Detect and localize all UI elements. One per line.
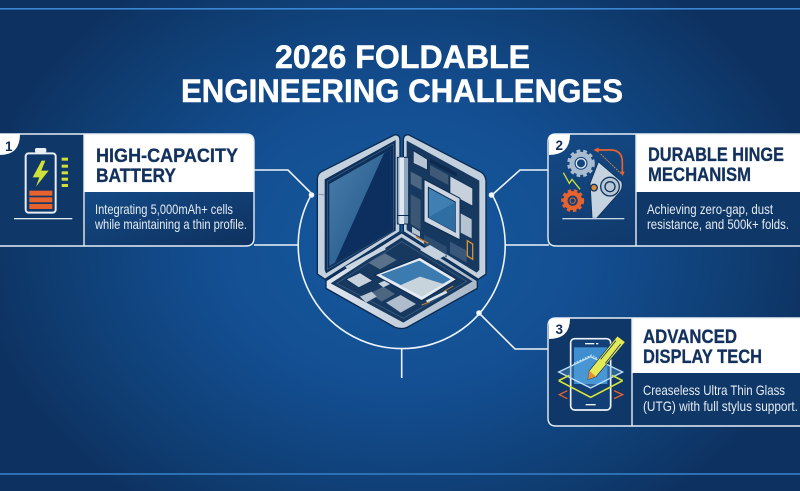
card 2 heading xyxy=(648,145,784,186)
icon: hinge and gears xyxy=(562,147,625,219)
card 1 panels xyxy=(0,134,254,246)
card 3 number badge: 3 xyxy=(556,322,564,337)
card 3 heading: ADVANCED xyxy=(643,327,737,348)
card 1 description xyxy=(94,201,247,232)
connector lines xyxy=(254,170,549,378)
card 2 number badge: 2 xyxy=(556,138,563,153)
card 3 description xyxy=(643,382,798,414)
card 2 number badge xyxy=(549,134,570,155)
title: 2026 FOLDABLE xyxy=(275,39,530,75)
device: hinge xyxy=(396,157,409,255)
card 3 heading xyxy=(643,327,762,368)
device: base panel xyxy=(326,233,477,329)
card 3 heading: DISPLAY TECH xyxy=(643,347,762,368)
card 1 number badge: 1 xyxy=(5,139,13,154)
card 3 number badge xyxy=(549,318,570,339)
icon: phone with stylus xyxy=(559,336,625,410)
device: left screen panel xyxy=(317,135,400,279)
title xyxy=(181,39,623,109)
foldable device illustration xyxy=(317,135,486,329)
title: ENGINEERING CHALLENGES xyxy=(181,73,623,109)
icon: battery xyxy=(14,148,72,219)
card 1 description: Integrating 5,000mAh+ cells xyxy=(95,201,233,217)
card 1 heading xyxy=(96,146,238,187)
device: right internals panel xyxy=(403,135,486,279)
card 2 heading: MECHANISM xyxy=(648,165,751,186)
card 2 panels xyxy=(548,134,800,246)
card 3: advanced display tech xyxy=(548,318,800,426)
card 1 heading: BATTERY xyxy=(96,166,176,187)
card 1 number badge xyxy=(0,134,20,155)
card 1: high-capacity battery xyxy=(0,134,254,246)
card 2 description: Achieving zero-gap, dust xyxy=(647,201,773,217)
card 2 description xyxy=(647,201,789,232)
card 1 heading: HIGH-CAPACITY xyxy=(96,146,238,167)
card 2: durable hinge mechanism xyxy=(548,134,800,246)
card 3 panels xyxy=(548,318,800,426)
card 1 description: while maintaining a thin profile. xyxy=(94,216,247,232)
